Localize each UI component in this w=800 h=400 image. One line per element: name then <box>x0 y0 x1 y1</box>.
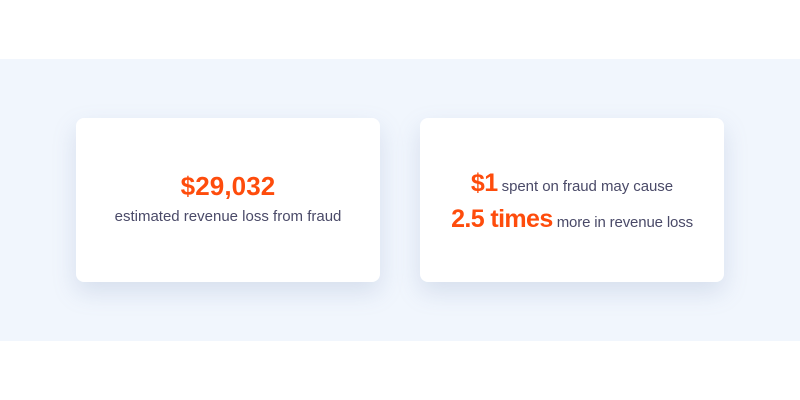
background band <box>0 59 800 341</box>
panel: fraud cost multiplier <box>420 118 724 282</box>
panel: revenue loss <box>76 118 380 282</box>
text: $1 spent on fraud: $1 spent on fraud may cause <box>471 169 673 197</box>
stat: $29,032: $29,032 <box>181 171 275 201</box>
text: 2.5 times more in revenue loss: 2.5 times more in revenue loss <box>451 205 693 233</box>
caption: estimated revenue loss: estimated revenue loss from fraud <box>115 208 341 225</box>
